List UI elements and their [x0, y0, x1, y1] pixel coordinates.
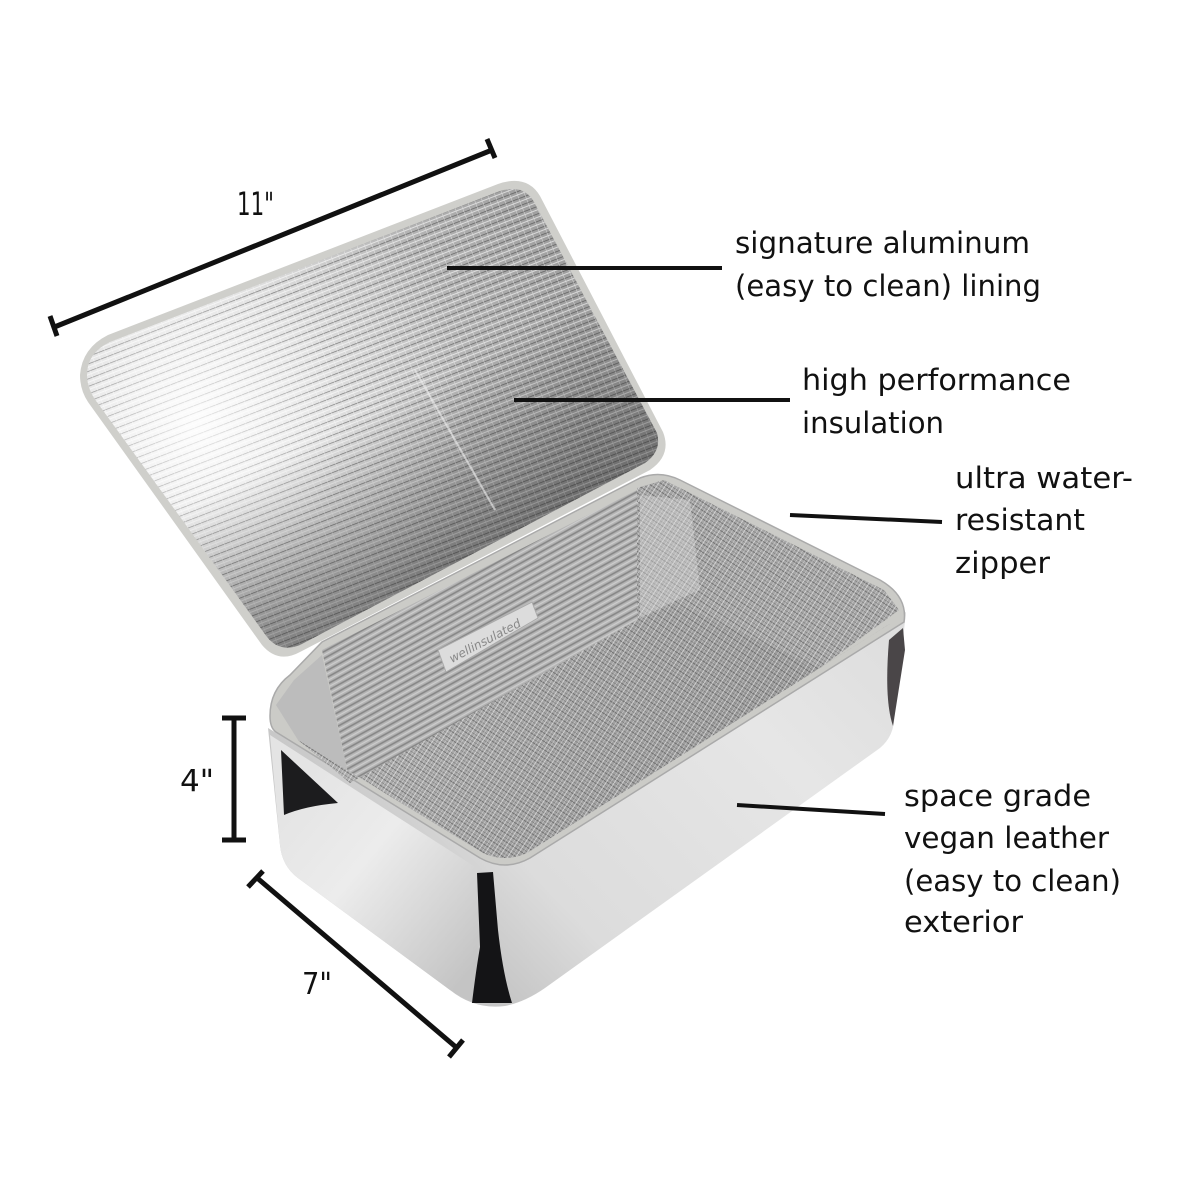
dimension: 7 inch depth: 7" — [302, 967, 332, 1002]
dimension: 11 inch width: 11" — [237, 185, 274, 223]
left face — [270, 735, 480, 1003]
callout: aluminum lining — [447, 226, 1041, 303]
lid: aluminum lining — [80, 181, 666, 657]
callout: exterior: vegan leather — [904, 821, 1109, 855]
callout: exterior: (easy to clean) — [904, 864, 1121, 898]
left wall — [276, 655, 350, 783]
back wall — [322, 490, 637, 783]
case interior — [270, 474, 904, 865]
callout: exterior — [737, 779, 1121, 939]
dimension: 11 inch width — [50, 139, 495, 336]
brand tag — [438, 602, 538, 672]
front corner dark reflection — [472, 872, 512, 1003]
floor — [298, 603, 899, 858]
product: open insulated lunch case — [80, 181, 906, 1007]
callout: zipper: ultra water- — [955, 461, 1133, 495]
callout: aluminum lining: (easy to clean) lining — [735, 269, 1041, 303]
case exterior: mirrored vegan leather — [268, 612, 906, 1007]
callout: exterior: space grade — [904, 779, 1091, 813]
dimension: 7 inch depth — [248, 871, 463, 1057]
dimension: 4 inch height: 4" — [180, 764, 214, 799]
callout: zipper: resistant — [955, 503, 1085, 537]
right wall crease highlight — [640, 495, 700, 618]
left dark reflection — [281, 750, 338, 815]
callout: aluminum lining: signature aluminum — [735, 226, 1030, 260]
callout: zipper: zipper — [955, 546, 1050, 580]
callout: zipper — [790, 461, 1133, 580]
brand tag: wellinsulated — [447, 616, 524, 666]
right corner dark reflection — [887, 628, 905, 726]
right wall — [637, 480, 899, 668]
dimension: 4 inch height — [180, 718, 246, 840]
callout: insulation — [514, 363, 1071, 440]
callout: exterior: exterior — [904, 905, 1023, 939]
callout: insulation: high performance — [802, 363, 1071, 397]
callout: insulation: insulation — [802, 406, 944, 440]
